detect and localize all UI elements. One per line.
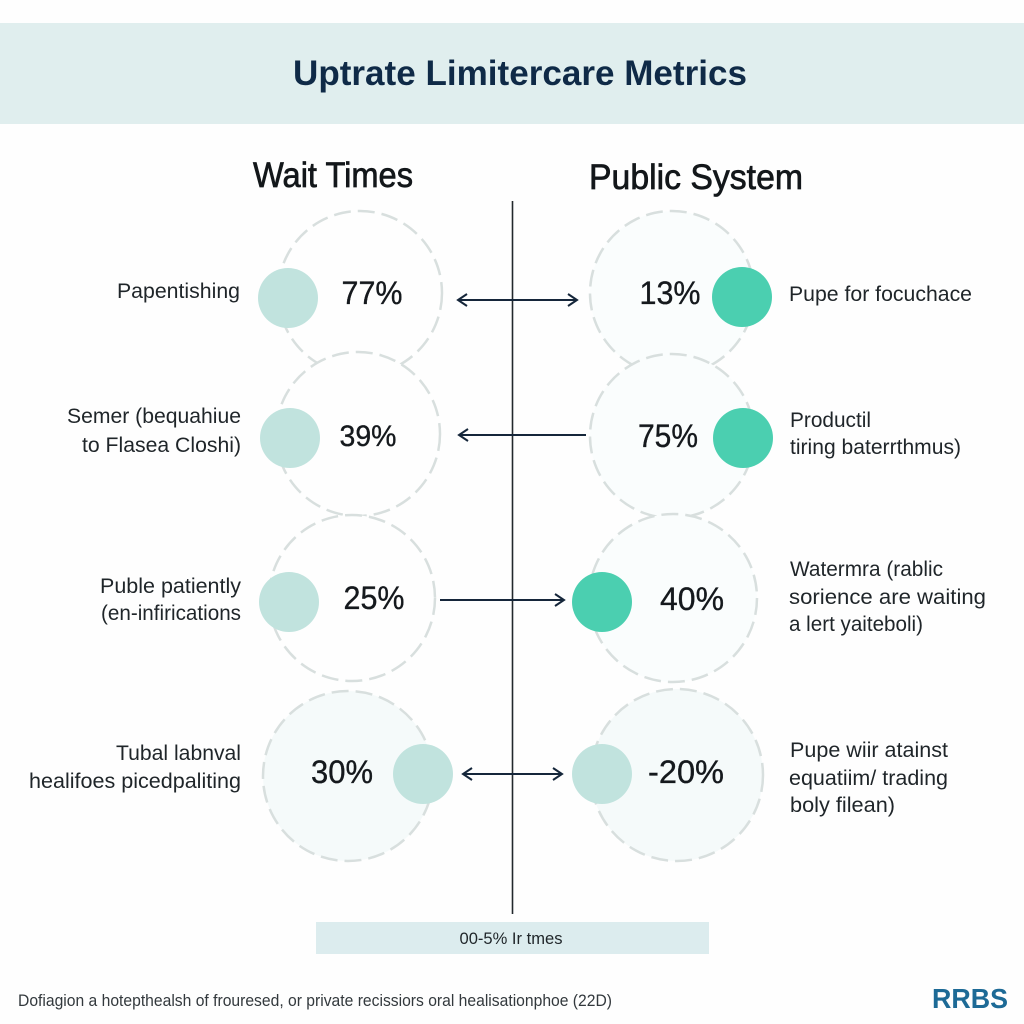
left label 3: Puble patiently bbox=[100, 575, 242, 598]
metric: -20% bbox=[572, 744, 724, 804]
right label 4: boly filean) bbox=[790, 794, 895, 817]
metric: 30%: 30% bbox=[311, 754, 373, 790]
right label 4: equatiim/ trading bbox=[789, 767, 948, 790]
metric: 75% bbox=[638, 408, 773, 468]
metric: 40% bbox=[572, 572, 724, 632]
metric: 13%: 13% bbox=[640, 275, 700, 311]
footer source note: Dofiagion a hotepthealsh of frouresed, or private recissiors oral healisationphoe (22D) bbox=[18, 991, 612, 1010]
metric: 39% bbox=[260, 408, 396, 468]
title banner bbox=[0, 23, 1024, 124]
center divider bbox=[512, 201, 514, 914]
left label 3: (en-infirications bbox=[101, 602, 241, 625]
metric: 77% bbox=[258, 268, 402, 328]
right label 2 bbox=[790, 409, 961, 459]
arrow row 3 bbox=[440, 594, 564, 606]
arrow row 1 bbox=[458, 294, 577, 306]
right label 2: Productil bbox=[790, 409, 871, 432]
metric: -20%: -20% bbox=[648, 754, 724, 790]
arrow row 2 bbox=[459, 429, 586, 441]
metric: 30% bbox=[311, 744, 453, 804]
left label 2: to Flasea Closhi) bbox=[82, 434, 241, 457]
panel: right column metrics bbox=[572, 211, 773, 861]
metric: 13% bbox=[640, 267, 772, 327]
left label 2: Semer (bequahiue bbox=[67, 405, 241, 428]
arrow row 4 bbox=[463, 768, 562, 780]
legend bar: 00-5% Ir tmes bbox=[460, 929, 562, 948]
metric: 25%: 25% bbox=[344, 580, 404, 616]
metric: 77%: 77% bbox=[342, 275, 402, 311]
left label 1: Papentishing bbox=[117, 280, 240, 303]
logo: RRBS: RRBS bbox=[932, 983, 1008, 1014]
right label 4 bbox=[789, 739, 948, 817]
legend bar bbox=[316, 922, 709, 954]
heading: public system: Public System bbox=[589, 158, 803, 197]
dashed rings left bbox=[263, 211, 442, 861]
metric: 75%: 75% bbox=[638, 418, 698, 454]
left label 4: Tubal labnval bbox=[116, 742, 241, 765]
right label 3: Watermra (rablic bbox=[790, 558, 943, 581]
metric: 40%: 40% bbox=[660, 581, 724, 617]
left label 4 bbox=[29, 742, 241, 793]
title: Uptrate Limitercare Metrics bbox=[293, 54, 747, 93]
right label 3: sorience are waiting bbox=[789, 586, 986, 609]
metric: 39%: 39% bbox=[340, 420, 396, 453]
panel: left column metrics bbox=[258, 211, 453, 861]
left label 2 bbox=[67, 405, 241, 457]
left label 3 bbox=[100, 575, 242, 625]
right label 4: Pupe wiir atainst bbox=[790, 739, 948, 762]
right label 3: a lert yaiteboli) bbox=[789, 613, 923, 636]
dashed rings right bbox=[589, 211, 763, 861]
metric: 25% bbox=[259, 572, 404, 632]
heading: wait times: Wait Times bbox=[253, 156, 413, 195]
right label 1: Pupe for focuchace bbox=[789, 283, 972, 306]
right label 2: tiring baterrthmus) bbox=[790, 436, 961, 459]
right label 3 bbox=[789, 558, 986, 636]
left label 4: healifoes picedpaliting bbox=[29, 770, 241, 793]
